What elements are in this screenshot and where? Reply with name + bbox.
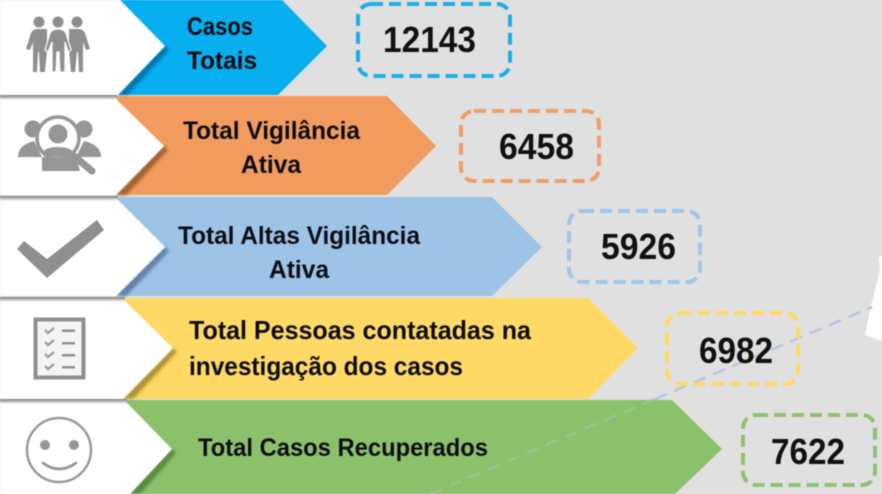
panel: white icon row 1 <box>0 0 165 95</box>
icon: magnifier and people <box>18 117 101 171</box>
icon: smiley <box>27 418 91 482</box>
value box: 7622: 7622 <box>771 431 845 472</box>
label: total altas vigilancia ativa: Ativa <box>269 256 330 284</box>
label: casos totais: Totais <box>187 47 257 75</box>
label: total pessoas contatadas: Total Pessoas contatadas na <box>189 315 532 345</box>
label: total pessoas contatadas: investigação dos casos <box>189 351 463 381</box>
icon: check mark <box>17 220 104 278</box>
panel: pessoas contatadas arrow <box>123 298 638 399</box>
value box: 5926 <box>569 211 700 282</box>
panel: recuperados arrow <box>125 400 722 494</box>
panel: vigilancia arrow <box>116 96 436 195</box>
value box: 6458: 6458 <box>499 126 574 167</box>
label: total altas vigilancia ativa: Total Altas Vigilância <box>178 222 421 250</box>
panel: casos totais arrow <box>118 0 327 95</box>
panel: white icon row 3 <box>0 196 165 296</box>
value box: 6982: 6982 <box>699 330 773 371</box>
icon: checklist <box>36 320 84 378</box>
value box: 6982 <box>667 313 798 384</box>
white shape at right edge <box>865 255 882 341</box>
value box: 12143: 12143 <box>383 19 476 60</box>
label: total vigilancia ativa: Ativa <box>241 151 302 179</box>
value box: 5926: 5926 <box>601 226 676 267</box>
value box: 7622 <box>743 415 875 485</box>
panel: white icon row 2 <box>0 95 164 195</box>
panel: altas arrow <box>116 197 542 296</box>
label: total casos recuperados: Total Casos Recuperados <box>198 434 488 462</box>
value box: 12143 <box>358 4 510 76</box>
icon: people <box>26 16 90 72</box>
dashed connector line <box>430 307 872 494</box>
panel: white icon row 4 <box>0 297 173 399</box>
label: casos totais: Casos <box>187 13 253 41</box>
panel: white icon row 5 <box>0 399 172 494</box>
value box: 6458 <box>461 111 599 181</box>
label: total vigilancia ativa: Total Vigilância <box>183 117 361 145</box>
